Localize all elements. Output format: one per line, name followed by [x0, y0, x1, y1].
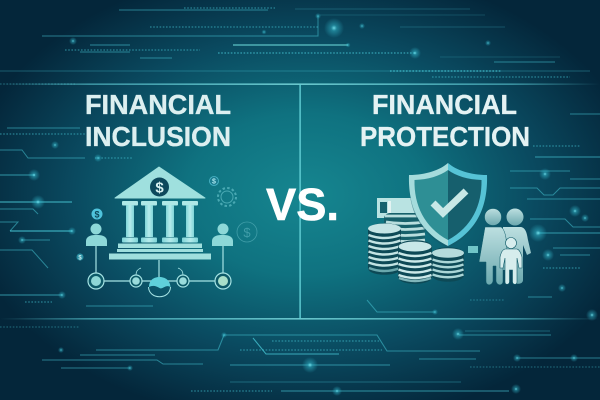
- icon: dollar coin left: $: [94, 210, 100, 220]
- icon: outlined dollar: [237, 222, 257, 242]
- icon: bank network: [76, 167, 257, 297]
- icon: right person: [212, 224, 233, 246]
- heading: Financial Inclusion: FINANCIAL: [85, 89, 231, 120]
- icon: gear: [218, 188, 236, 206]
- heading: Financial Inclusion: [85, 89, 231, 152]
- coin stack: middle: [398, 240, 432, 284]
- icon: left person: [86, 224, 107, 246]
- network connections: [96, 246, 223, 297]
- icon: small dollar upper right: [210, 176, 218, 186]
- icon: outlined dollar: $: [243, 225, 251, 240]
- network nodes: [88, 273, 231, 289]
- coin stack: short right: [432, 247, 464, 282]
- icon: small dollar lower left: $: [78, 256, 82, 262]
- bag: [468, 246, 478, 253]
- icon: small dollar lower left: [76, 254, 84, 262]
- divider frame: [0, 84, 600, 320]
- shield check mark: [433, 191, 466, 213]
- coin stack: tall left: [368, 223, 401, 275]
- child: [500, 238, 522, 284]
- heading: Financial Protection: FINANCIAL: [372, 89, 517, 120]
- banknote card: [377, 198, 415, 218]
- versus label: VS.: [266, 179, 339, 230]
- bank dollar coin: $: [155, 180, 164, 196]
- left adult: [479, 208, 508, 285]
- icon: money and shield group: [368, 163, 531, 285]
- bank dollar coin: [150, 178, 169, 196]
- heading: Financial Protection: PROTECTION: [360, 121, 530, 152]
- bank columns: [122, 201, 198, 242]
- icon: family: [468, 208, 531, 285]
- bank roof: [115, 167, 205, 198]
- icon: dollar coin left: [92, 208, 102, 220]
- heading: Financial Inclusion: INCLUSION: [85, 121, 231, 152]
- right adult: [503, 208, 531, 284]
- coin stack: back: [384, 213, 425, 261]
- icon: small dollar upper right: $: [212, 178, 216, 186]
- heading: Financial Protection: [360, 89, 530, 152]
- bank steps: [109, 244, 211, 260]
- icon: shield: [409, 163, 487, 248]
